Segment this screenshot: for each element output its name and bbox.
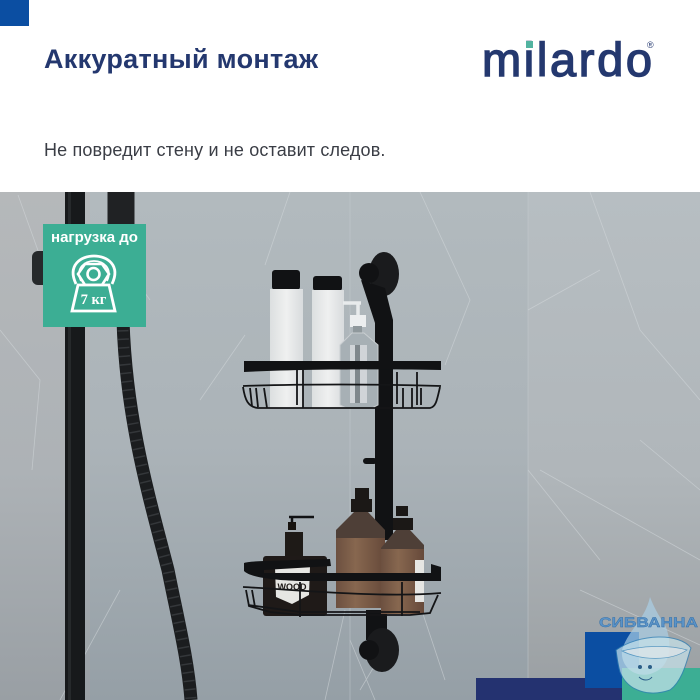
blue block [585,632,639,688]
upper bottles [270,270,378,408]
shelf frame with suction cups [359,252,399,672]
shower rod [32,192,85,700]
icon: weight with nut [70,254,117,312]
subtitle: Не повредит стену и не оставит следов. [44,140,386,160]
upper basket [243,361,441,408]
wall panels [0,192,700,700]
navy corner block [476,678,622,700]
lower bottles: WOOD [278,582,307,592]
icon: weight with nut: 7 кг [81,292,107,308]
logo: milardo: ® [647,40,654,50]
corner square [0,0,29,26]
teal block [622,668,700,700]
title: Аккуратный монтаж [44,44,318,74]
watermark: СИБВАННА: СИБВАННА [599,614,698,630]
shower hose [121,192,191,700]
lower basket [243,559,441,617]
badge label: нагрузка до [51,229,138,246]
badge: load up to 7 kg [43,224,146,327]
lower bottles [263,488,424,616]
photo: shower wall with shelf [0,192,700,700]
watermark: СИБВАННА [599,598,698,694]
